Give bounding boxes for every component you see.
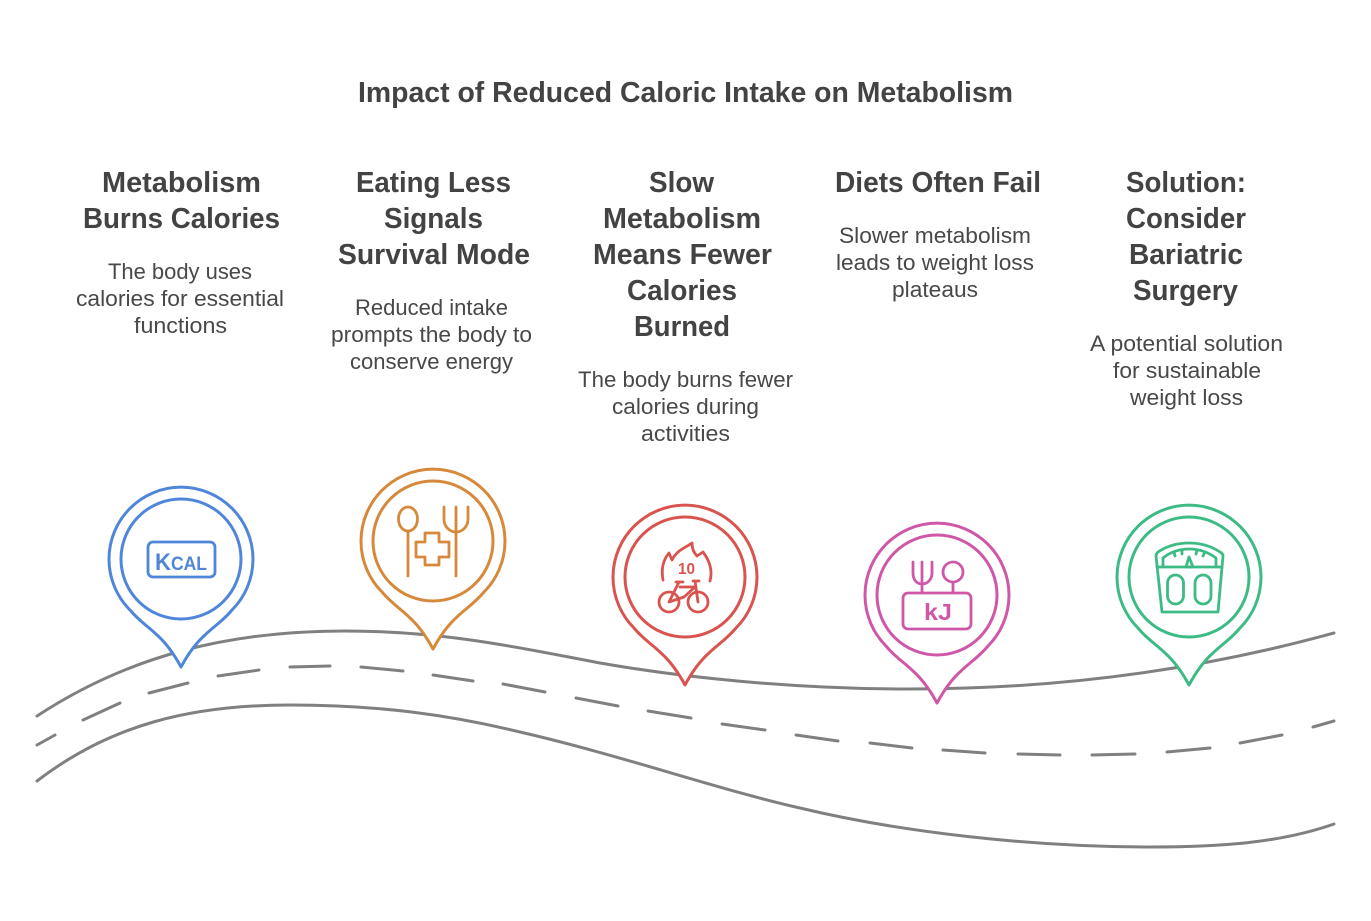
text: body burns fewer: calories during — [612, 394, 759, 419]
heading: metabolism burns calories: Burns Calories — [83, 203, 280, 235]
text: potential solution — [1090, 331, 1283, 410]
panel: eating less — [331, 167, 532, 649]
heading: eating less signals survival mode — [338, 167, 530, 271]
text: potential solution: weight loss — [1129, 385, 1243, 410]
text: reduced intake: Reduced intake — [355, 295, 508, 320]
pin: flame and bicycle — [613, 505, 757, 685]
text: body uses calories: functions — [134, 313, 227, 338]
title: Impact of Reduced Caloric Intake on Metabolism — [358, 77, 1013, 109]
icon: fork, spoon and kJ — [903, 562, 971, 629]
icon: flame and bicycle — [659, 543, 711, 612]
road — [37, 631, 1334, 847]
text: potential solution: for sustainable — [1113, 358, 1261, 383]
panel: metabolism burns calories — [76, 167, 284, 667]
panel: slow metabolism — [578, 167, 793, 685]
pin: scale — [1117, 505, 1261, 685]
text: slower metabolism: leads to weight loss — [836, 250, 1034, 275]
text: body uses calories: The body uses — [108, 259, 252, 284]
text: reduced intake: conserve energy — [350, 349, 514, 374]
heading: eating less signals survival mode: Survival Mode — [338, 239, 530, 271]
text: body uses calories: calories for essential — [76, 286, 284, 311]
icon: fork, spoon and kJ: kJ — [924, 599, 952, 625]
panel: solution — [1090, 167, 1283, 685]
text: body burns fewer — [578, 367, 793, 446]
text: slower metabolism: plateaus — [892, 277, 978, 302]
heading: solution consider bariatric surgery: Consider — [1126, 203, 1246, 235]
text: slower metabolism — [836, 223, 1034, 302]
text: body uses calories — [76, 259, 284, 338]
text: body burns fewer: The body burns fewer — [578, 367, 793, 392]
text: potential solution: A potential solution — [1090, 331, 1283, 356]
icon: kcal label — [148, 542, 215, 577]
heading: eating less signals survival mode: Eating Less — [356, 167, 511, 199]
heading: solution consider bariatric surgery: Solution: — [1126, 167, 1246, 199]
heading: eating less signals survival mode: Signals — [384, 203, 483, 235]
heading: slow metabolism means fewer calories burned: Burned — [634, 311, 730, 343]
heading: slow metabolism means fewer calories burned: Metabolism — [603, 203, 761, 235]
pin: fork spoon cross — [361, 469, 505, 649]
text: reduced intake — [331, 295, 532, 374]
icon: spoon, fork and cross — [398, 507, 468, 576]
heading: solution consider bariatric surgery: Surgery — [1133, 275, 1238, 307]
icon: weighing scale — [1156, 543, 1223, 612]
heading: metabolism burns calories — [83, 167, 280, 235]
pin: kcal — [109, 487, 253, 667]
text: slower metabolism: Slower metabolism — [839, 223, 1031, 248]
heading: metabolism burns calories: Metabolism — [102, 167, 261, 199]
text: reduced intake: prompts the body to — [331, 322, 532, 347]
panel: diets often fail — [835, 167, 1041, 703]
heading: slow metabolism means fewer calories burned: Means Fewer — [593, 239, 772, 271]
heading: slow metabolism means fewer calories burned: Slow — [649, 167, 714, 199]
heading: slow metabolism means fewer calories burned: Calories — [627, 275, 737, 307]
heading: solution consider bariatric surgery — [1126, 167, 1246, 307]
heading: solution consider bariatric surgery: Bariatric — [1129, 239, 1243, 271]
icon: flame and bicycle: 10 — [678, 561, 695, 578]
icon: kcal label: KCAL — [155, 549, 207, 576]
heading: diets often fail: Diets Often Fail — [835, 167, 1041, 199]
heading: slow metabolism means fewer calories burned — [593, 167, 772, 343]
text: body burns fewer: activities — [641, 421, 730, 446]
pin: kilojoules — [865, 523, 1009, 703]
